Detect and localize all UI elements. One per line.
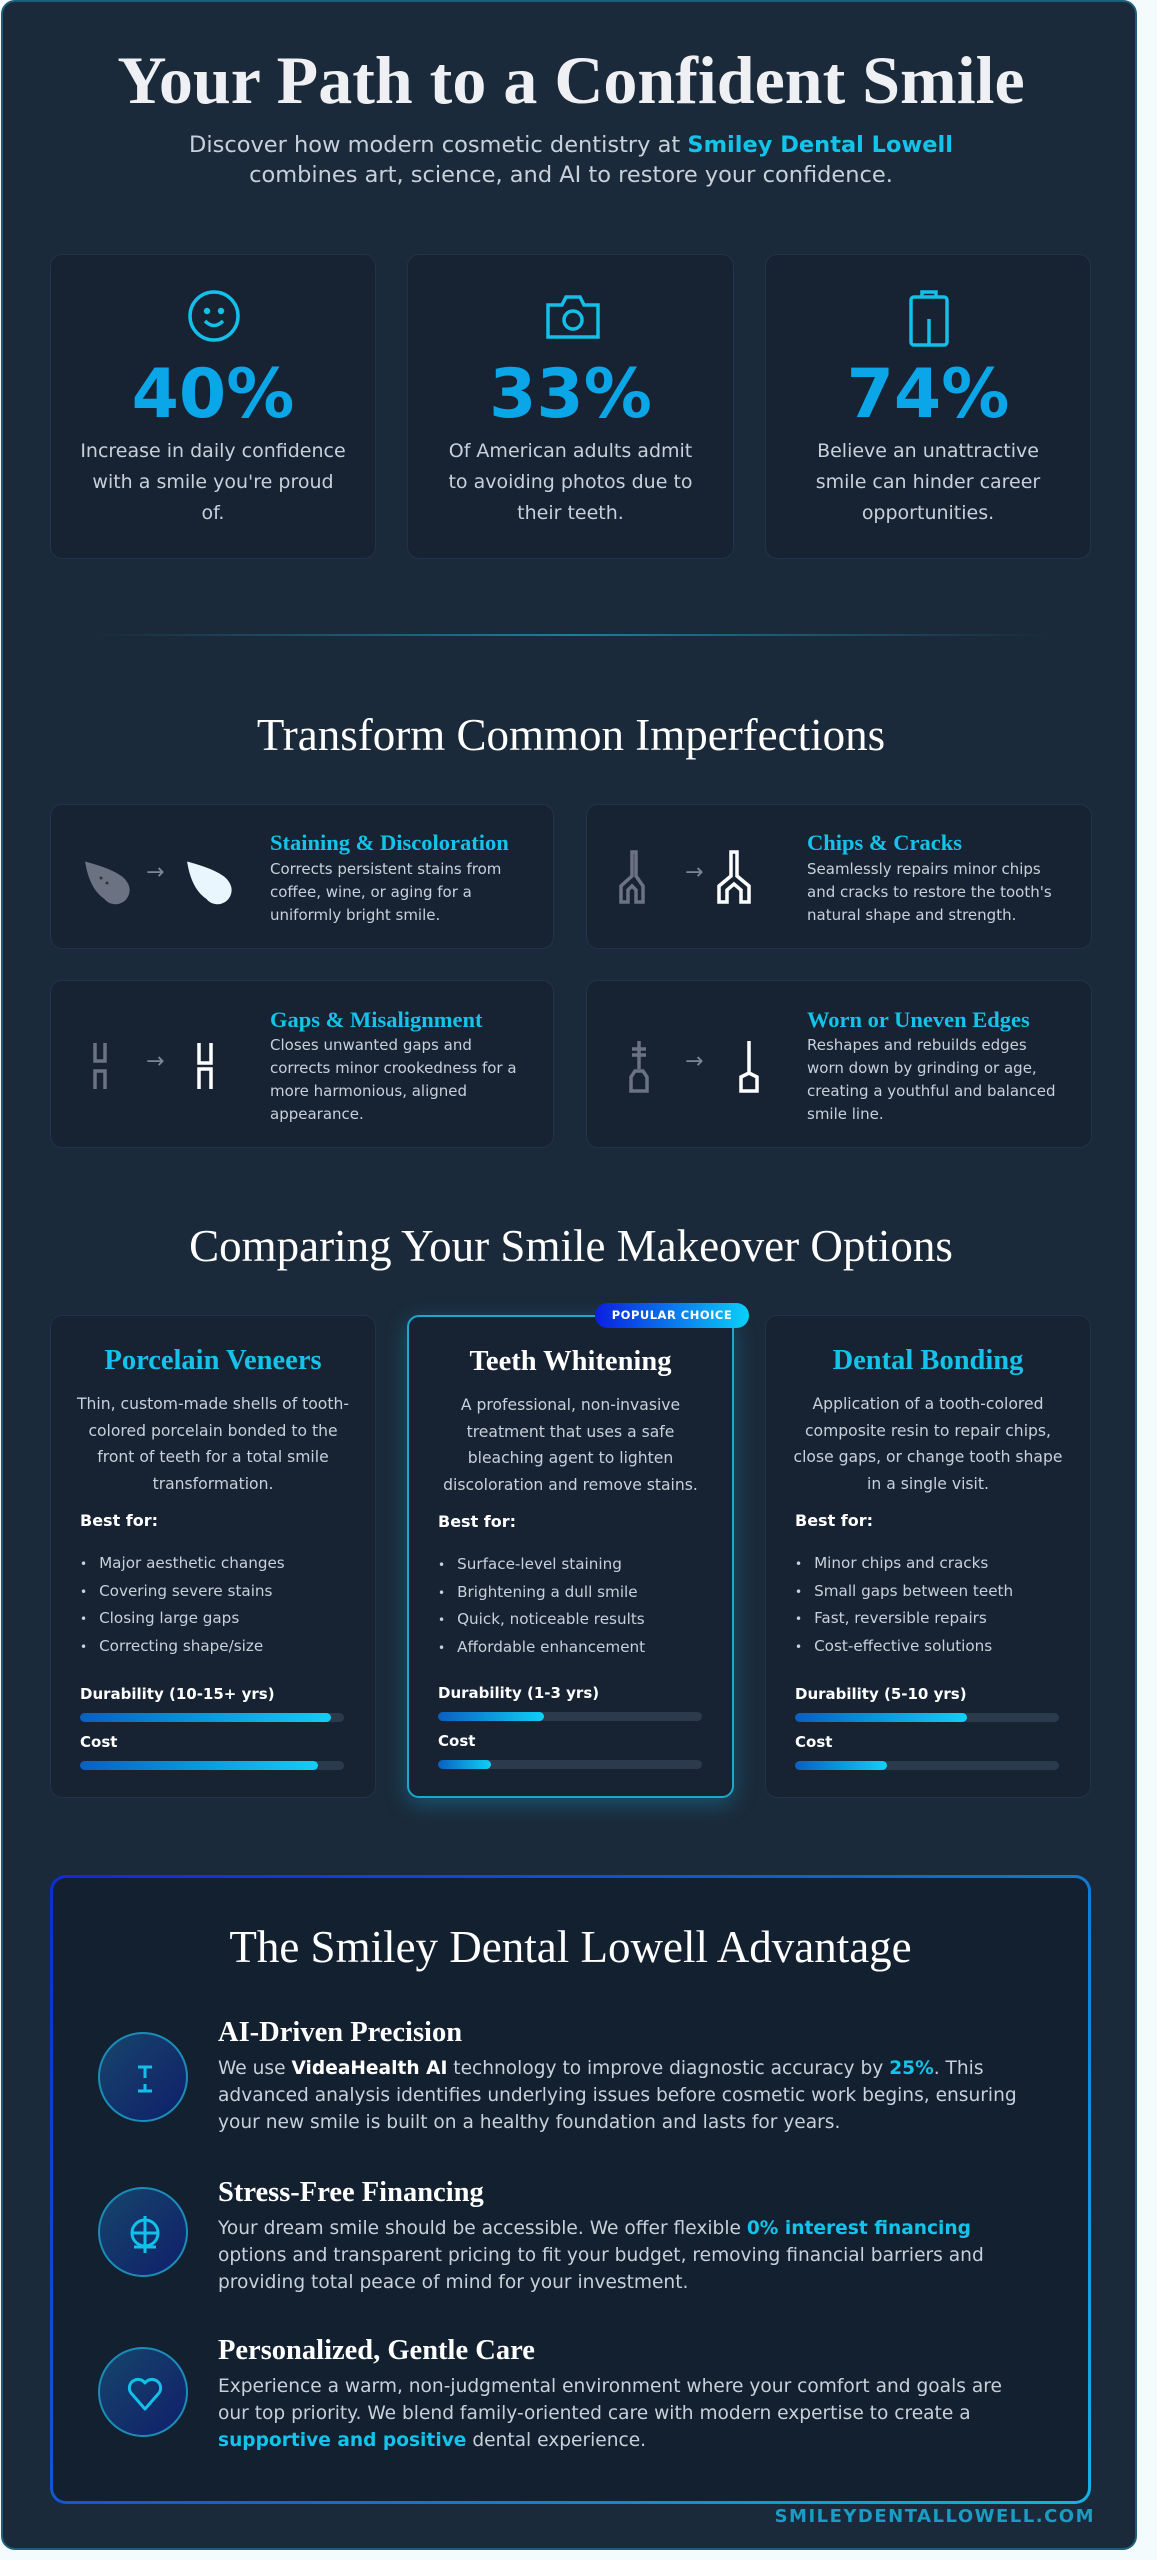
stat card: 74%: opportunities. xyxy=(862,502,994,524)
panel: gaps xyxy=(50,980,554,1148)
panel: worn edges: Reshapes and rebuilds edges xyxy=(807,1036,1027,1054)
icon: briefcase xyxy=(909,290,949,347)
item: gentle care: Personalized, Gentle Care xyxy=(218,2335,535,2366)
panel: teeth whitening: Teeth Whitening xyxy=(470,1346,671,1377)
panel: dental bonding: Small gaps between teeth xyxy=(814,1582,1013,1600)
panel: worn edges: creating a youthful and balanced xyxy=(807,1082,1056,1100)
panel: dental bonding: Cost xyxy=(795,1733,832,1751)
panel: chips: → xyxy=(685,860,703,885)
panel: worn edges: Worn or Uneven Edges xyxy=(807,1007,1030,1032)
panel: teeth whitening: Affordable enhancement xyxy=(457,1638,645,1656)
panel: gaps: → xyxy=(146,1049,164,1074)
stat card: 40%: with a smile you're proud xyxy=(92,471,334,493)
panel: staining xyxy=(50,804,554,949)
stat card: 74%: smile can hinder career xyxy=(816,471,1040,493)
item: AI precision: AI-Driven Precision xyxy=(218,2017,462,2048)
panel: porcelain veneers: Porcelain Veneers xyxy=(104,1345,322,1376)
item: financing: Your dream smile should be accessible. We offer flexible 0% interest financing options and transparent pricing to fit your budget, removing financial barriers and providing total peace of mind for your investment. xyxy=(218,2218,984,2293)
panel: dental bonding: Minor chips and cracks xyxy=(814,1554,988,1572)
title: Your Path to a Confident Smile xyxy=(117,42,1025,118)
panel: porcelain veneers: Thin, custom-made shells of tooth-colored porcelain bonded to the front of teeth for a total smile transformation. xyxy=(77,1395,349,1492)
item: gentle care: Experience a warm, non-judgmental environment where your comfort and goals are our top priority. We blend family-oriented care with modern expertise to create a supportive and positive dental experience. xyxy=(218,2376,1002,2451)
panel: dental bonding: Best for: xyxy=(795,1511,873,1530)
panel: worn edges: → xyxy=(685,1049,703,1074)
panel: dental bonding: Durability (5-10 yrs) xyxy=(795,1685,967,1703)
panel: staining: coffee, wine, or aging for a xyxy=(270,883,472,901)
stat card: 40% xyxy=(50,254,376,559)
badge: popular choice: POPULAR CHOICE xyxy=(612,1308,732,1322)
panel: chips: and cracks to restore the tooth's xyxy=(807,883,1052,901)
panel: teeth whitening: A professional, non-invasive treatment that uses a safe bleaching agent to lighten discoloration and remove stains. xyxy=(443,1396,698,1494)
panel: chips: Chips & Cracks xyxy=(807,830,962,855)
panel: worn edges xyxy=(586,980,1092,1148)
stat card: 74%: Believe an unattractive xyxy=(817,440,1039,462)
panel: teeth whitening: Durability (1-3 yrs) xyxy=(438,1684,599,1702)
panel: porcelain veneers: Covering severe stains xyxy=(99,1582,272,1600)
panel: teeth whitening: Cost xyxy=(438,1732,475,1750)
panel: porcelain veneers: Durability (10-15+ yrs) xyxy=(80,1685,275,1703)
badge: popular choice xyxy=(595,1303,749,1328)
panel: chips: natural shape and strength. xyxy=(807,906,1016,924)
panel: porcelain veneers xyxy=(50,1315,376,1798)
panel: teeth whitening: Quick, noticeable results xyxy=(457,1610,645,1628)
panel: teeth whitening: Best for: xyxy=(438,1512,516,1531)
icon: gaps to closed xyxy=(93,1043,213,1089)
item: financing xyxy=(98,2177,984,2293)
panel: porcelain veneers: Cost xyxy=(80,1733,117,1751)
panel: dental bonding: Cost-effective solutions xyxy=(814,1636,992,1654)
subtitle xyxy=(189,132,953,188)
stat card: 40%: 40% xyxy=(132,355,294,434)
panel: advantage xyxy=(50,1875,1091,2504)
bar: cost xyxy=(795,1761,1059,1770)
bar: durability xyxy=(795,1713,1059,1722)
item: financing: Stress-Free Financing xyxy=(218,2177,484,2208)
panel: teeth whitening: Brightening a dull smile xyxy=(457,1582,638,1600)
icon: tooth chip to whole xyxy=(619,850,751,904)
stat card: 40%: of. xyxy=(202,502,224,524)
panel: gaps: Closes unwanted gaps and xyxy=(270,1036,472,1054)
panel: dental bonding xyxy=(765,1315,1091,1798)
panel: staining: → xyxy=(146,860,164,885)
panel: dental bonding: Dental Bonding xyxy=(833,1345,1023,1376)
icon: stained to white xyxy=(85,862,232,904)
bar: durability xyxy=(80,1713,344,1722)
panel: porcelain veneers: Major aesthetic changes xyxy=(99,1554,285,1572)
stat card: 74%: 74% xyxy=(847,355,1009,434)
panel: chips: Seamlessly repairs minor chips xyxy=(807,860,1041,878)
panel: gaps: Gaps & Misalignment xyxy=(270,1007,483,1032)
stat card: 33%: to avoiding photos due to xyxy=(448,471,693,493)
panel: dental bonding: Application of a tooth-colored composite resin to repair chips, close gaps, or change tooth shape in a single visit. xyxy=(794,1395,1062,1492)
panel: porcelain veneers: Closing large gaps xyxy=(99,1609,239,1627)
panel: teeth whitening xyxy=(407,1315,734,1798)
stat card: 40%: Increase in daily confidence xyxy=(80,440,346,462)
panel: staining: Corrects persistent stains from xyxy=(270,860,501,878)
icon: financing xyxy=(98,2187,188,2277)
subtitle: combines art, science, and AI to restore your confidence. xyxy=(249,162,893,188)
panel: dental bonding: Fast, reversible repairs xyxy=(814,1609,987,1627)
bar: durability xyxy=(438,1712,702,1721)
footer url: SMILEYDENTALLOWELL.COM xyxy=(775,2506,1095,2527)
subtitle: Discover how modern cosmetic dentistry at Smiley Dental Lowell xyxy=(189,132,953,158)
panel: worn edges: worn down by grinding or age, xyxy=(807,1059,1037,1077)
stat card: 33%: their teeth. xyxy=(517,502,624,524)
stat card: 33%: Of American adults admit xyxy=(449,440,692,462)
heading: advantage: The Smiley Dental Lowell Advantage xyxy=(229,1922,912,1972)
stat card: 33%: 33% xyxy=(489,355,652,434)
bar: cost xyxy=(438,1760,702,1769)
panel: porcelain veneers: Correcting shape/size xyxy=(99,1636,263,1654)
panel: gaps: more harmonious, aligned xyxy=(270,1082,467,1100)
heading: comparing options: Comparing Your Smile Makeover Options xyxy=(189,1221,953,1271)
panel: staining: uniformly bright smile. xyxy=(270,906,440,924)
panel: gaps: corrects minor crookedness for a xyxy=(270,1059,517,1077)
icon: AI xyxy=(98,2032,188,2122)
panel: chips xyxy=(586,804,1092,949)
stat card: 33% xyxy=(407,254,734,559)
panel: teeth whitening: Surface-level staining xyxy=(457,1555,622,1573)
icon: heart xyxy=(98,2347,188,2437)
icon: smiley xyxy=(188,290,240,342)
item: AI precision xyxy=(98,2017,1017,2133)
stat card: 74% xyxy=(765,254,1091,559)
item: AI precision: We use VideaHealth AI technology to improve diagnostic accuracy by 25%. This advanced analysis identifies underlying issues before cosmetic work begins, ensuring your new smile is built on a healthy foundation and lasts for years. xyxy=(218,2058,1017,2133)
heading: transform imperfections: Transform Common Imperfections xyxy=(257,710,885,760)
panel: worn edges: smile line. xyxy=(807,1105,884,1123)
bar: cost xyxy=(80,1761,344,1770)
icon: camera xyxy=(546,295,600,339)
panel: porcelain veneers: Best for: xyxy=(80,1511,158,1530)
icon: worn to reshaped xyxy=(629,1041,759,1093)
panel: staining: Staining & Discoloration xyxy=(270,830,509,855)
panel: gaps: appearance. xyxy=(270,1105,364,1123)
divider xyxy=(93,634,1049,636)
item: gentle care xyxy=(98,2335,1002,2451)
